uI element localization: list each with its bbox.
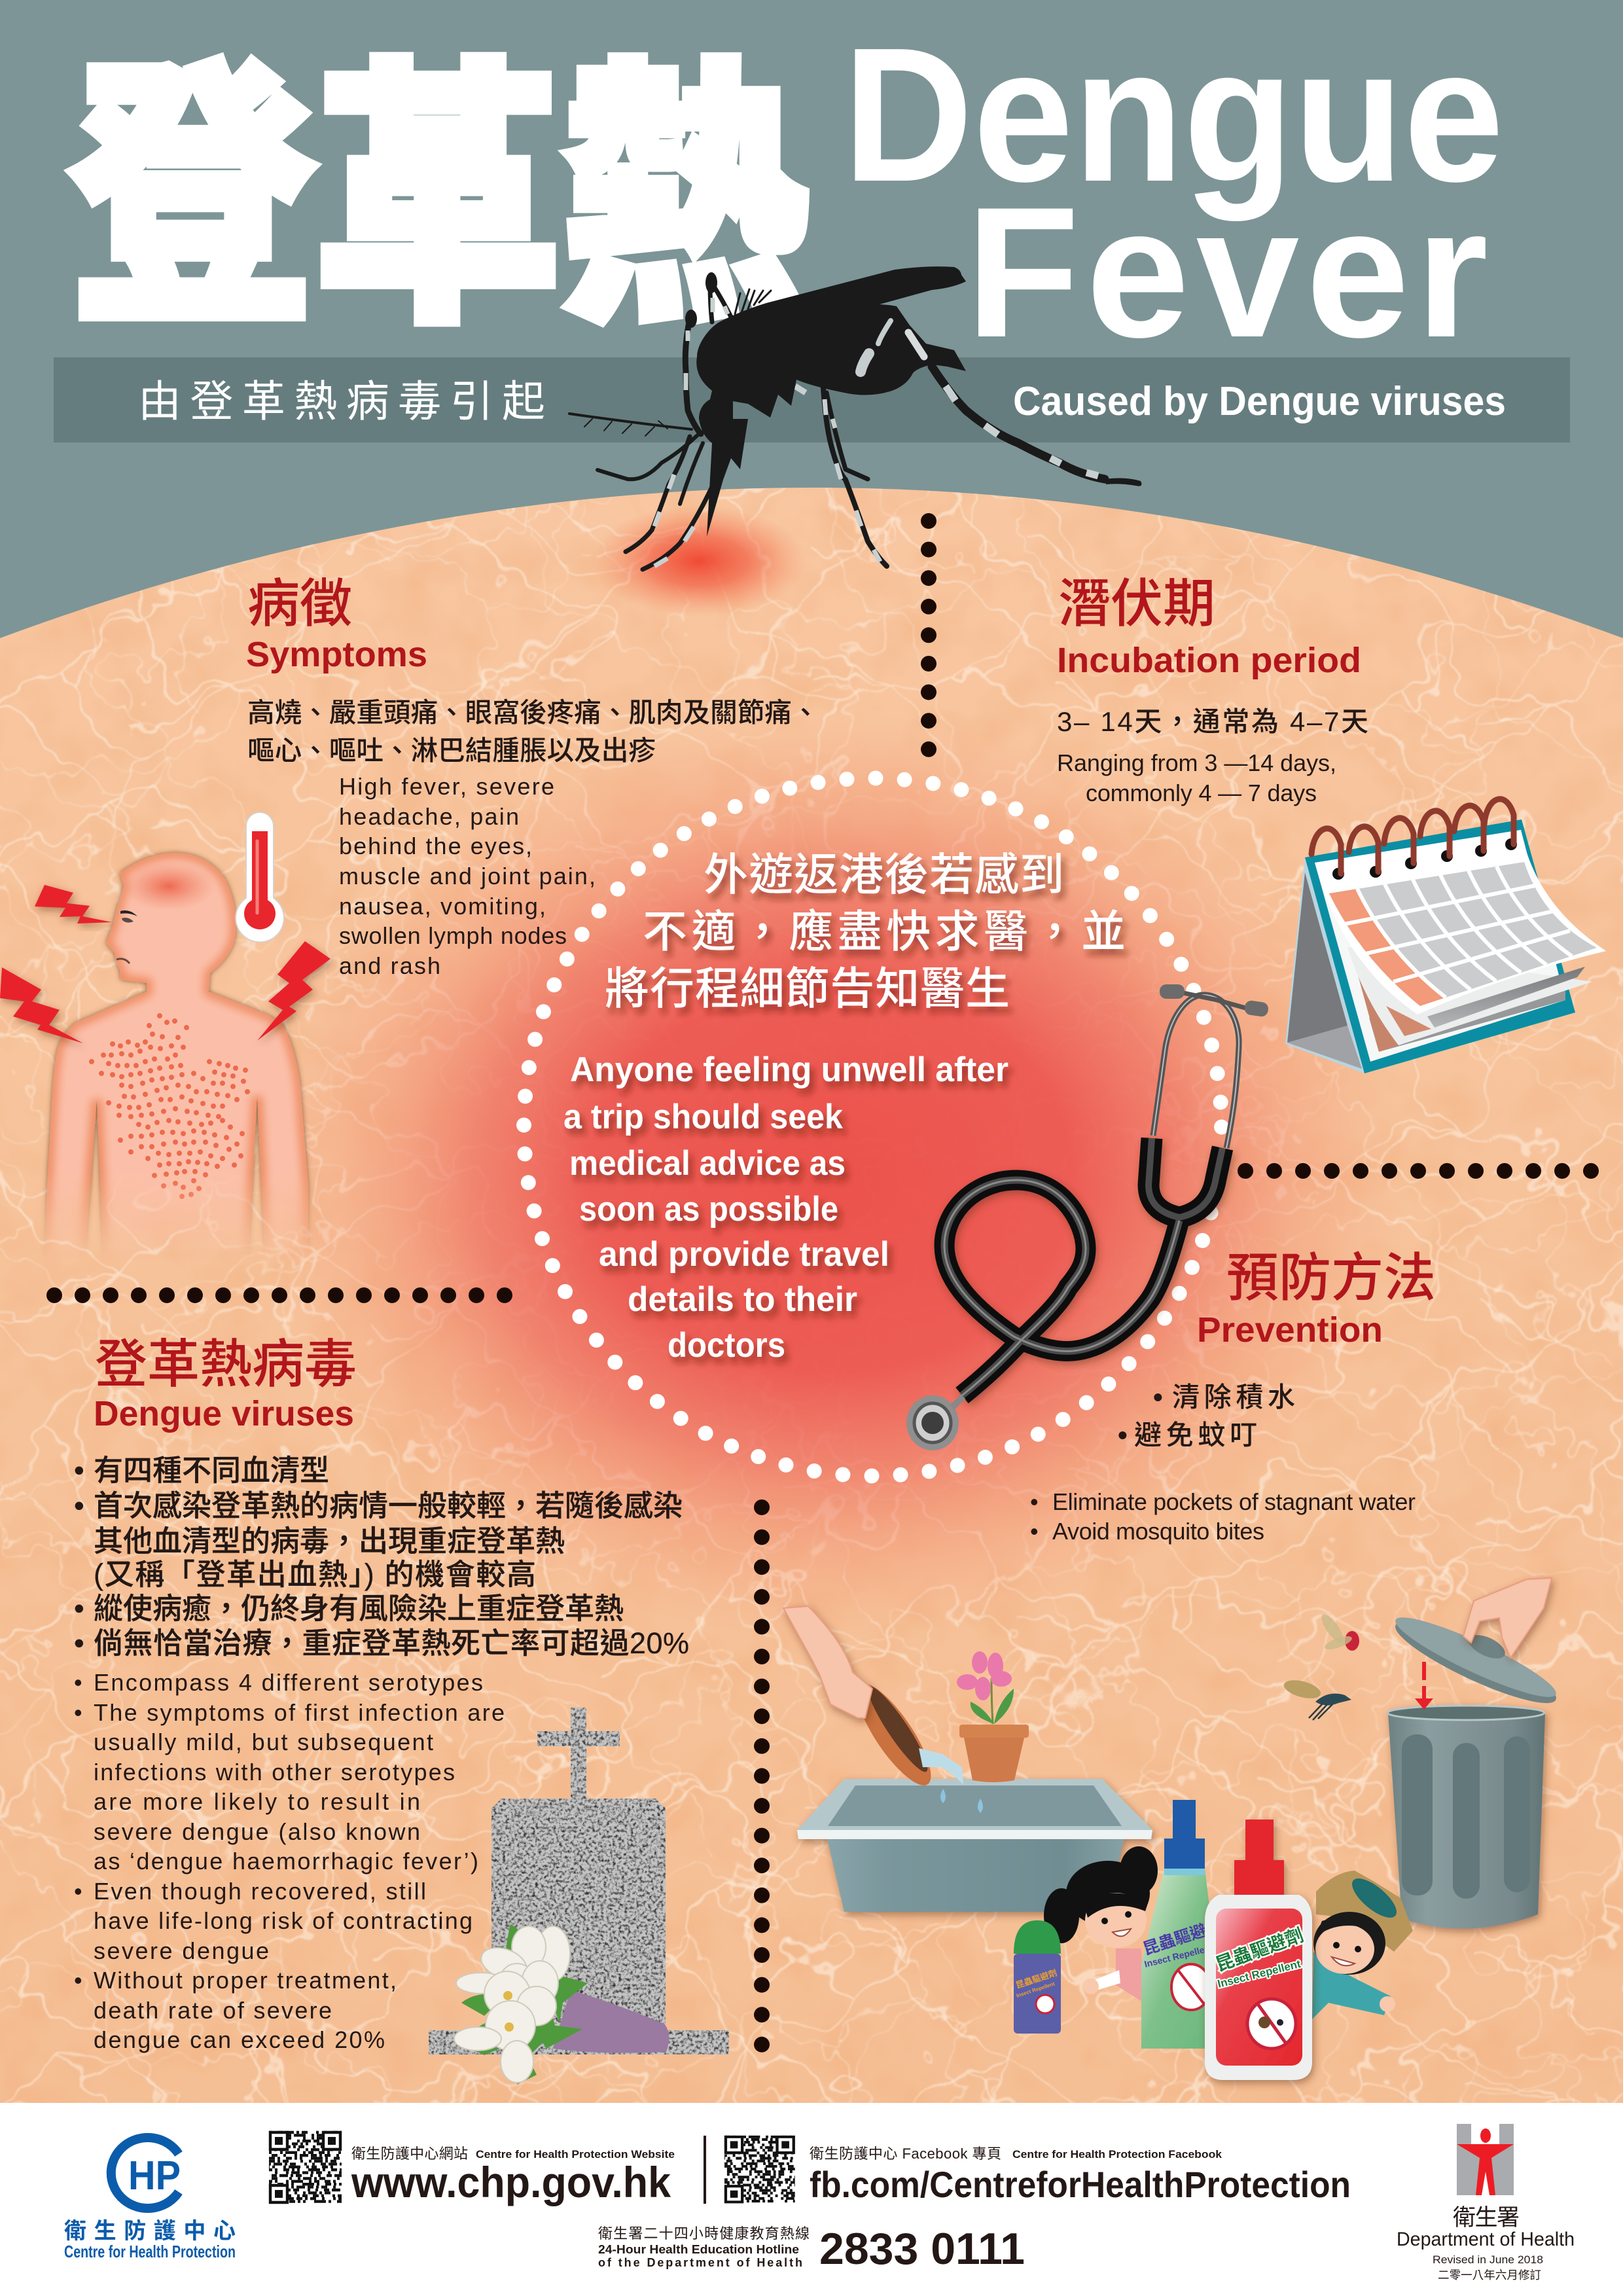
heading: prevention: 預防方法 [1226,1249,1436,1307]
text: advice English: doctors [668,1326,785,1365]
subheading: symptoms: Symptoms [246,635,427,674]
dotted divider: top [921,521,936,750]
text: advice English: medical advice as [569,1144,846,1183]
text: symptoms English: High fever, severe [339,773,554,800]
icon: green repellent [1141,1800,1214,2049]
logo: Centre for Health Protection [64,2138,236,2261]
logo: Department of Health: 二零一八年六月修訂 [1438,2269,1541,2282]
text: viruses Chinese list: 有四種不同血清型 [94,1454,329,1487]
QR code: website [269,2131,342,2204]
subheading: prevention: Prevention [1197,1310,1383,1350]
icon: bin lid and hand [1388,1578,1563,1716]
text: viruses English list: severe dengue [94,1937,269,1964]
dotted divider: bottom [754,1507,770,2046]
text: advice Chinese: 將行程細節告知醫生 [605,964,1010,1014]
text: Facebook: 衛生防護中心 Facebook 專頁 [810,2145,1001,2162]
text: viruses English list: Without proper treatment, [94,1967,397,1994]
panel: symptoms [0,575,819,1260]
logo: Centre for Health Protection: HP [128,2153,181,2198]
text: viruses Chinese list: 首次感染登革熱的病情一般較輕，若隨後感染 [94,1489,683,1522]
logo: Department of Health: Revised in June 2018 [1433,2253,1543,2266]
text: advice Chinese [605,850,1126,1014]
icon: small repellent: 昆蟲驅避劑 [1014,1967,1058,1990]
icon: red repellent: Insect Repellent [1216,1958,1302,1990]
divider [704,2136,706,2204]
text: advice English: details to their [628,1280,857,1319]
icon: rubbish bin [1387,1706,1545,1929]
text: advice English: and provide travel [599,1235,889,1274]
text: viruses English list: Encompass 4 different serotypes [94,1669,483,1696]
icon: lightning bolt at eye [35,885,112,924]
panel: incubation period [1057,575,1606,1073]
subheading: dengue viruses: Dengue viruses [94,1394,354,1433]
text: symptoms English [339,773,596,979]
text: hotline: 衛生署二十四小時健康教育熱線 [598,2225,810,2242]
text: viruses English list: infections with other serotypes [94,1759,455,1785]
heading: incubation: 潛伏期 [1058,575,1215,633]
text: viruses Chinese list: • [74,1592,84,1625]
text: symptoms English: behind the eyes, [339,833,532,859]
text: incubation English: Ranging from 3 —14 days, [1057,749,1336,776]
text: viruses English list: are more likely to result in [94,1788,420,1815]
icon: girl [1044,1846,1158,2003]
text: prevention Chinese: 避免蚊叮 [1134,1420,1257,1450]
text: symptoms Chinese: 高燒、嚴重頭痛、眼窩後疼痛、肌肉及關節痛、 [247,697,819,728]
text: advice English [563,1050,1008,1365]
icon: lightning bolt left shoulder [0,967,83,1043]
text: symptoms Chinese: 嘔心、嘔吐、淋巴結腫脹以及出疹 [247,735,656,766]
text: advice English: Anyone feeling unwell after [570,1050,1008,1089]
text: viruses Chinese list: • [74,1489,84,1522]
icon: thermometer [236,812,284,942]
text: viruses Chinese list [74,1454,689,1660]
logo: Department of Health [1397,2124,1575,2282]
text: viruses English list [74,1669,505,2053]
text: viruses English list: • [74,1967,82,1994]
text: Facebook: fb.com/CentreforHealthProtection [810,2164,1351,2205]
logo: Department of Health: 衛生署 [1453,2205,1520,2231]
text: hotline: 24-Hour Health Education Hotline [598,2243,799,2256]
text: prevention English: • [1030,1488,1039,1515]
icon: flower pot [957,1651,1029,1782]
icon: man with rash [45,853,308,1260]
header background [0,0,1623,655]
subtitle band [54,357,1570,442]
icon: mosquito [569,266,1141,569]
subtitle: Chinese: 由登革熱病毒引起 [138,377,545,425]
icon: small repellent: Insect Repellent [1016,1981,1056,1999]
panel: travel advice [563,850,1269,1450]
icon: hand pouring water from saucer [783,1606,983,1813]
text: hotline: 2833 0111 [819,2224,1025,2274]
title: Dengue Fever: Fever [966,169,1488,376]
text: hotline [598,2224,1025,2274]
text: viruses English list: • [74,1669,82,1696]
text: prevention Chinese: • [1118,1420,1128,1450]
panel: dengue viruses [74,1335,729,2085]
text: advice English: a trip should seek [563,1098,843,1136]
text: viruses Chinese list: 縱使病癒，仍終身有風險染上重症登革熱 [94,1592,624,1625]
text: incubation English [1057,749,1336,806]
subheading: incubation: Incubation period [1057,641,1361,680]
title: Dengue Fever: Dengue [843,8,1504,223]
QR code: Facebook [724,2136,795,2203]
logo: Centre for Health Protection: Centre for Health Protection [64,2242,236,2261]
text: Facebook: Centre for Health Protection Facebook [1012,2148,1222,2161]
text: viruses Chinese list: 倘無恰當治療，重症登革熱死亡率可超過20% [94,1626,689,1660]
text: viruses English list: usually mild, but subsequent [94,1729,433,1755]
icon: small repellent [1014,1920,1061,2034]
panel: prevention [783,1249,1563,2080]
text: advice Chinese: 外遊返港後若感到 [704,850,1064,900]
text: incubation English: commonly 4 — 7 days [1086,780,1317,806]
text: viruses Chinese list: • [74,1626,84,1660]
subtitle: English: Caused by Dengue viruses [1013,379,1506,424]
text: advice Chinese: 不適，應盡快求醫，並 [643,907,1126,957]
icon: stethoscope [906,984,1269,1450]
logo: Department of Health: Department of Health [1397,2229,1575,2250]
text: viruses English list: dengue can exceed 20% [94,2026,385,2053]
text: prevention Chinese [1118,1382,1295,1450]
icon: red repellent: 昆蟲驅避劑 [1213,1925,1306,1975]
footer background [0,2103,1623,2296]
logo: Centre for Health Protection: 衛生防護中心 [64,2219,236,2244]
text: viruses English list: as ‘dengue haemorrhagic fever’) [94,1848,478,1874]
icon: insects [1282,1611,1359,1720]
text: viruses English list: • [74,1699,82,1726]
heading: dengue viruses: 登革熱病毒 [95,1335,357,1393]
icon: gravestone with flowers [429,1708,729,2085]
icon: lightning bolt right shoulder [257,941,330,1041]
icon: water basin [797,1779,1152,1912]
text: viruses Chinese list: • [74,1454,84,1487]
text: incubation Chinese: 3– 14天，通常為 4–7天 [1057,706,1368,737]
icon: red repellent [1205,1820,1312,2080]
text: prevention English [1030,1488,1416,1545]
text: viruses English list: have life-long risk of contracting [94,1907,473,1934]
text: prevention Chinese: 清除積水 [1172,1382,1295,1412]
text: viruses English list: The symptoms of first infection are [94,1699,505,1726]
text: viruses English list: Even though recovered, still [94,1878,426,1905]
icon: calendar [1285,799,1606,1073]
text: viruses Chinese list: 其他血清型的病毒，出現重症登革熱 [94,1524,565,1558]
text: prevention English: Eliminate pockets of stagnant water [1052,1488,1416,1515]
arrow: red into bin [1415,1662,1433,1710]
text: website: www.chp.gov.hk [351,2158,671,2206]
text: symptoms Chinese [247,697,819,766]
heading: symptoms: 病徵 [247,575,352,633]
text: website: 衛生防護中心網站 [351,2145,468,2162]
dotted divider: right [1245,1163,1592,1179]
text: symptoms English: and rash [339,952,440,979]
text: prevention Chinese: • [1153,1382,1163,1412]
text: symptoms English: nausea, vomiting, [339,893,546,920]
text: symptoms English: swollen lymph nodes [339,922,567,949]
text: prevention English: • [1030,1518,1039,1545]
text: prevention English: Avoid mosquito bites [1052,1518,1264,1545]
text: hotline: of the Department of Health [598,2256,802,2269]
title: Dengue Fever [843,8,1504,376]
text: viruses English list: severe dengue (also known [94,1818,420,1845]
text: viruses English list: death rate of severe [94,1997,332,2024]
icon: green repellent: Insect Repellent [1143,1942,1214,1969]
text: symptoms English: headache, pain [339,803,519,830]
text: viruses English list: • [74,1878,82,1905]
text: symptoms English: muscle and joint pain, [339,863,596,889]
text: Facebook [810,2145,1351,2205]
dotted divider: left [54,1287,505,1303]
text: website: Centre for Health Protection Website [476,2148,675,2161]
icon: green repellent: 昆蟲驅避 [1141,1921,1209,1959]
text: viruses Chinese list: (又稱「登革出血熱」) 的機會較高 [94,1558,536,1591]
title: Chinese: 登革熱 [69,45,807,355]
skin background [0,393,1623,2173]
icon: boy [1312,1871,1413,2019]
text: advice English: soon as possible [579,1190,838,1229]
dotted ring [524,778,1221,1476]
